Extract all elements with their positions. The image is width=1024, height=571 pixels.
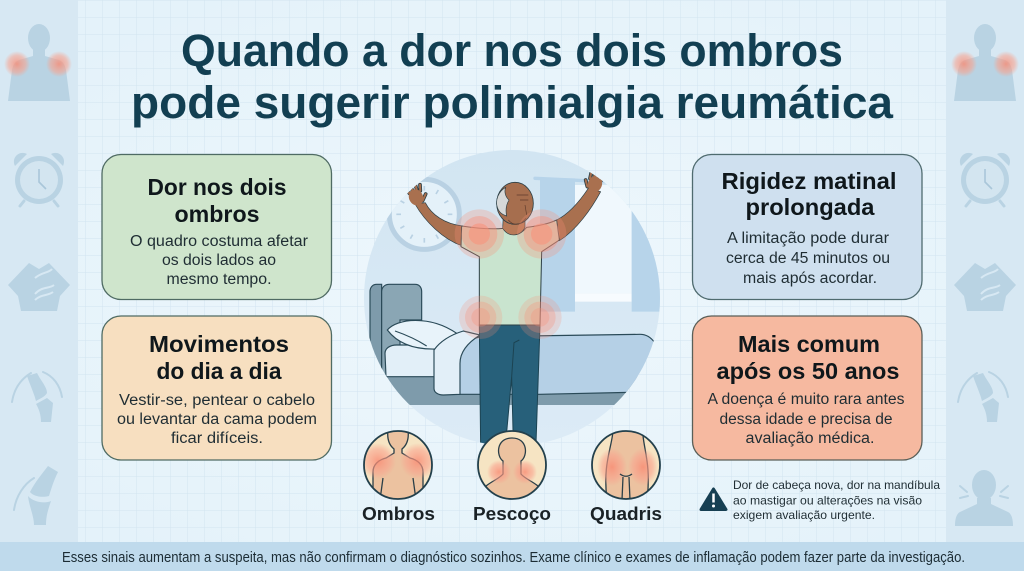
warning text: exigem avaliação urgente. bbox=[733, 508, 875, 522]
panel: mais comum após os 50 anos: A doença é muito rara antes bbox=[708, 391, 905, 408]
warning text: Dor de cabeça nova, dor na mandíbula bbox=[733, 478, 940, 492]
panel: dor nos dois ombros: os dois lados ao bbox=[162, 252, 276, 269]
icon: alarm clock bbox=[14, 153, 64, 206]
icon: neck pain bbox=[955, 470, 1013, 526]
panel: rigidez matinal bbox=[692, 154, 922, 300]
panel: movimentos do dia a dia: do dia a dia bbox=[156, 358, 282, 384]
warning text: ao mastigar ou alterações na visão bbox=[733, 494, 922, 508]
icon: knee joint right bbox=[958, 372, 1008, 422]
panel: dor nos dois ombros: mesmo tempo. bbox=[166, 271, 272, 288]
panel: mais comum após os 50 anos bbox=[692, 316, 922, 460]
labels: body regions: Pescoço bbox=[473, 504, 551, 524]
panel: mais comum após os 50 anos: dessa idade e precisa de bbox=[720, 411, 892, 428]
wall clock bbox=[389, 179, 459, 249]
title: Quando a dor nos dois ombros bbox=[181, 25, 843, 76]
icon: warning triangle bbox=[701, 489, 726, 510]
left decorative panel bbox=[0, 0, 78, 542]
title bbox=[131, 25, 894, 128]
bedroom scene bbox=[370, 169, 660, 448]
panel: rigidez matinal: mais após acordar. bbox=[743, 270, 877, 287]
icon: shoulders body bbox=[4, 24, 72, 101]
panel: movimentos do dia a dia: ficar difíceis. bbox=[171, 430, 263, 447]
panel: rigidez matinal: A limitação pode durar bbox=[727, 230, 889, 247]
panel: movimentos do dia a dia bbox=[102, 316, 332, 460]
icon: shirt right bbox=[954, 263, 1016, 311]
figure: legs bbox=[479, 325, 540, 448]
panel: dor nos dois ombros bbox=[102, 154, 332, 300]
labels: body regions: Ombros bbox=[362, 504, 435, 524]
panel: movimentos do dia a dia: Movimentos bbox=[149, 331, 289, 357]
labels: body regions: Quadris bbox=[590, 504, 662, 524]
panel: rigidez matinal: cerca de 45 minutos ou bbox=[726, 250, 890, 267]
icon: shirt bbox=[8, 263, 70, 311]
pain hotspots bbox=[455, 209, 566, 339]
detail: quadris bbox=[592, 425, 660, 500]
panel: mais comum após os 50 anos: após os 50 anos bbox=[716, 358, 900, 384]
bed bbox=[370, 284, 660, 405]
central illustration bbox=[364, 150, 660, 448]
window and curtains bbox=[535, 178, 660, 312]
right decorative panel bbox=[946, 0, 1024, 542]
panel: rigidez matinal: prolongada bbox=[746, 194, 875, 220]
figure: shirt bbox=[461, 220, 559, 325]
icon: alarm clock right bbox=[960, 153, 1010, 206]
panel: mais comum após os 50 anos: avaliação médica. bbox=[746, 430, 874, 447]
figure: neck and head bbox=[497, 182, 533, 235]
labels: body regions bbox=[362, 504, 662, 524]
icon: shoulders body right bbox=[951, 24, 1019, 101]
panel: movimentos do dia a dia: Vestir-se, pentear o cabelo bbox=[119, 392, 315, 409]
footer band bbox=[0, 542, 1024, 571]
panel: dor nos dois ombros: ombros bbox=[174, 201, 260, 227]
panel: movimentos do dia a dia: ou levantar da cama podem bbox=[117, 411, 317, 428]
panel: dor nos dois ombros: Dor nos dois bbox=[148, 174, 286, 200]
warning text bbox=[733, 478, 940, 522]
figure: left arm and hand bbox=[405, 183, 463, 246]
title: pode sugerir polimialgia reumática bbox=[131, 77, 894, 128]
figure: right arm and hand bbox=[557, 169, 605, 241]
detail: pescoço bbox=[478, 431, 546, 505]
panel: mais comum após os 50 anos: Mais comum bbox=[738, 331, 880, 357]
icon: hip joint bbox=[14, 466, 58, 525]
icon: knee joint bbox=[12, 372, 62, 422]
detail: ombros bbox=[360, 430, 436, 500]
panel: rigidez matinal: Rigidez matinal bbox=[722, 168, 896, 194]
panel: dor nos dois ombros: O quadro costuma afetar bbox=[130, 233, 308, 250]
background circle bbox=[364, 150, 660, 446]
